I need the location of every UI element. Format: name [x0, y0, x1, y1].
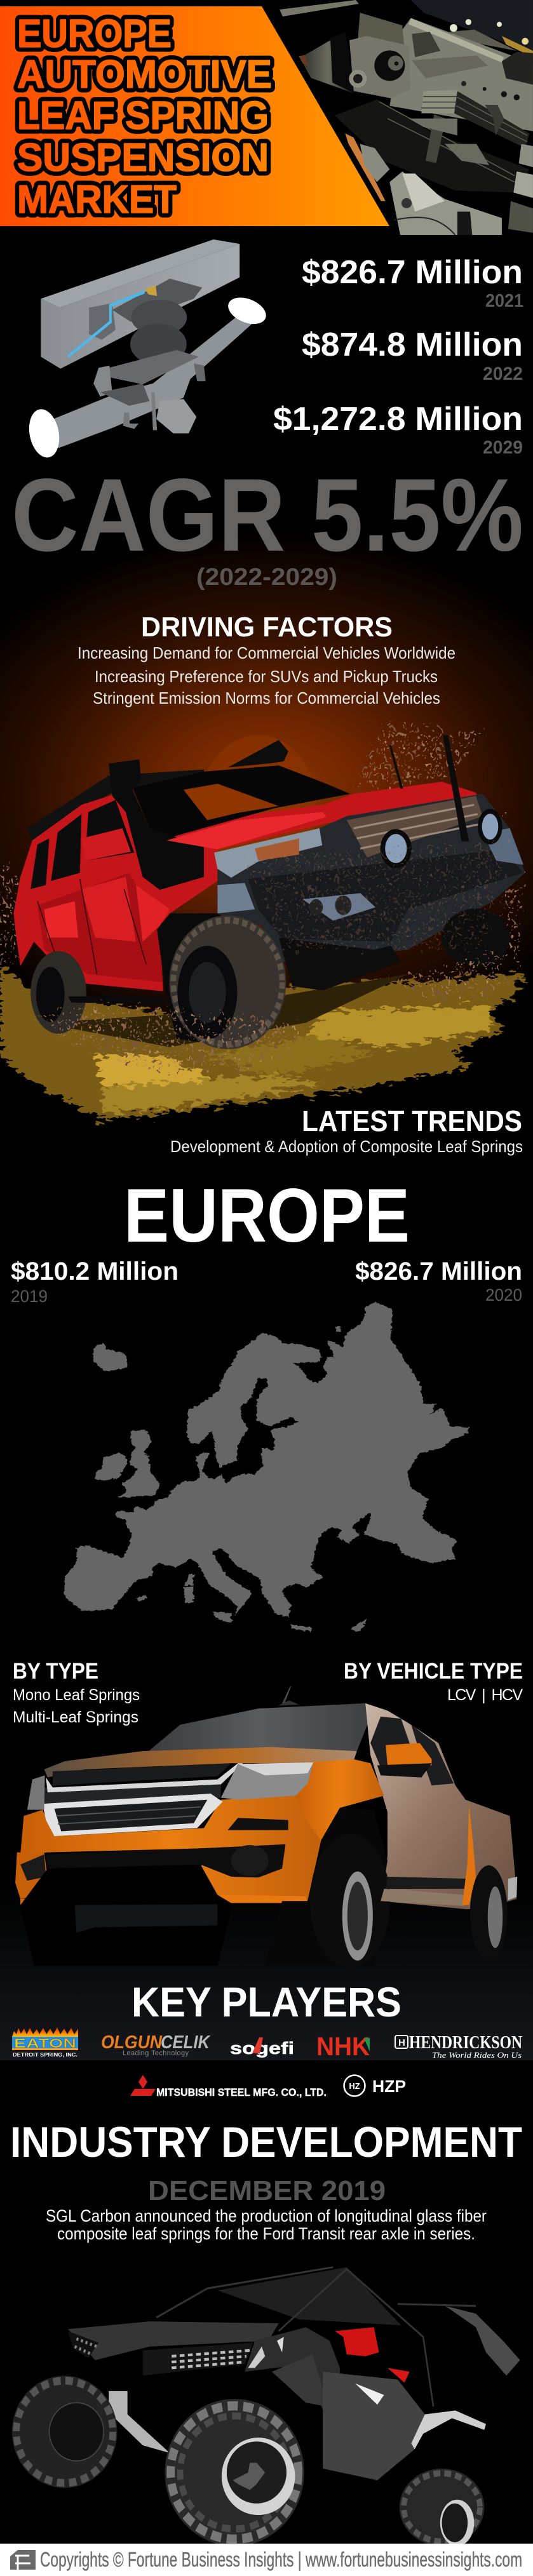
title — [17, 12, 272, 222]
logo: NHK: NHK — [316, 2032, 370, 2061]
logo: Mitsubishi Steel: MITSUBISHI STEEL MFG. CO., LTD. — [156, 2086, 327, 2098]
icon: Fortune Business Insights logo — [10, 2550, 36, 2570]
logo: HZP — [344, 2076, 406, 2096]
logo: Sogefi: sogefi — [230, 2039, 294, 2058]
key players heading: KEY PLAYERS — [132, 1978, 401, 2025]
development date: DECEMBER 2019 — [148, 2175, 386, 2206]
Europe 2020 value — [355, 1258, 522, 1305]
truck floor shading — [0, 1880, 533, 2060]
development description: composite leaf springs for the Ford Transit rear axle in series. — [57, 2224, 475, 2243]
logo: Olgun Celik: Leading Technology — [123, 2049, 189, 2057]
stat: 2029 market size — [273, 401, 523, 458]
logo: Eaton Detroit Spring: DETROIT SPRING, INC. — [13, 2052, 78, 2058]
title: AUTOMOTIVE — [17, 53, 272, 97]
title: EUROPE — [17, 12, 172, 56]
driving factors heading: DRIVING FACTORS — [141, 612, 393, 643]
logo: Hendrickson — [395, 2033, 522, 2060]
by type block: Multi-Leaf Springs — [13, 1708, 138, 1726]
title: LEAF SPRING — [17, 94, 269, 138]
stat: 2022 market size: $874.8 Million — [302, 326, 523, 363]
logo: Hendrickson: H — [398, 2037, 405, 2048]
title: SUSPENSION — [17, 136, 269, 180]
logo: Olgun Celik: OLGUN — [101, 2032, 163, 2053]
title: LEAF SPRING — [17, 94, 269, 138]
stat: 2022 market size: 2022 — [483, 364, 523, 384]
driving factors list: Increasing Demand for Commercial Vehicles Worldwide — [78, 643, 455, 662]
stat: 2022 market size — [302, 326, 523, 384]
Europe 2019 value: $810.2 Million — [11, 1258, 179, 1285]
title: MARKET — [17, 178, 177, 222]
stat: 2021 market size: $826.7 Million — [302, 254, 523, 291]
by type block: BY TYPE — [13, 1659, 98, 1684]
logo: Olgun Celik — [101, 2032, 211, 2057]
Europe 2019 value: 2019 — [11, 1287, 48, 1306]
title: SUSPENSION — [17, 136, 269, 180]
orange title panel — [0, 6, 389, 226]
background glow behind vehicle — [0, 530, 533, 1064]
CAGR period: (2022-2029) — [196, 564, 337, 591]
logo: Eaton Detroit Spring — [12, 2027, 78, 2058]
Europe 2019 value — [11, 1258, 179, 1306]
by type block — [13, 1659, 140, 1726]
stat: 2021 market size: 2021 — [485, 291, 523, 311]
logo: HZP: HZP — [372, 2077, 406, 2096]
driving factors list — [78, 643, 455, 708]
Europe 2020 value: $826.7 Million — [355, 1258, 522, 1285]
stat: 2029 market size: $1,272.8 Million — [273, 401, 523, 438]
logo: Mitsubishi Steel — [130, 2075, 327, 2098]
development description: SGL Carbon announced the production of longitudinal glass fiber — [46, 2206, 487, 2225]
illustration: grey off-road buggy — [12, 2267, 520, 2546]
stat: 2029 market size: 2029 — [483, 438, 523, 458]
by vehicle type block: LCV | HCV — [447, 1686, 523, 1704]
by type block: Mono Leaf Springs — [13, 1686, 140, 1704]
footer bar — [0, 2544, 533, 2576]
logo: Eaton Detroit Spring: EATON — [14, 2037, 76, 2051]
title: EUROPE — [17, 12, 172, 56]
logo: Hendrickson: The World Rides On Us — [432, 2050, 522, 2060]
title: MARKET — [17, 178, 177, 222]
driving factors list: Increasing Preference for SUVs and Pickup Trucks — [95, 667, 438, 686]
map of Europe — [65, 1302, 469, 1632]
illustration: red off-road SUV in mud — [0, 719, 525, 1120]
title: AUTOMOTIVE — [17, 53, 272, 97]
logo: HZP: HZ — [349, 2081, 360, 2091]
Europe 2020 value: 2020 — [485, 1285, 522, 1305]
header photo: leaf spring assembly — [280, 0, 533, 235]
logo: Olgun Celik: CELIK — [161, 2032, 211, 2053]
by vehicle type block — [344, 1659, 523, 1704]
Europe heading: EUROPE — [124, 1173, 410, 1258]
illustration: orange pickup truck — [15, 1686, 517, 1968]
development description — [46, 2206, 487, 2243]
driving factors list: Stringent Emission Norms for Commercial Vehicles — [93, 688, 440, 708]
stat: 2021 market size — [302, 254, 523, 311]
icon: air spring and leaf spring diagram — [24, 239, 268, 464]
